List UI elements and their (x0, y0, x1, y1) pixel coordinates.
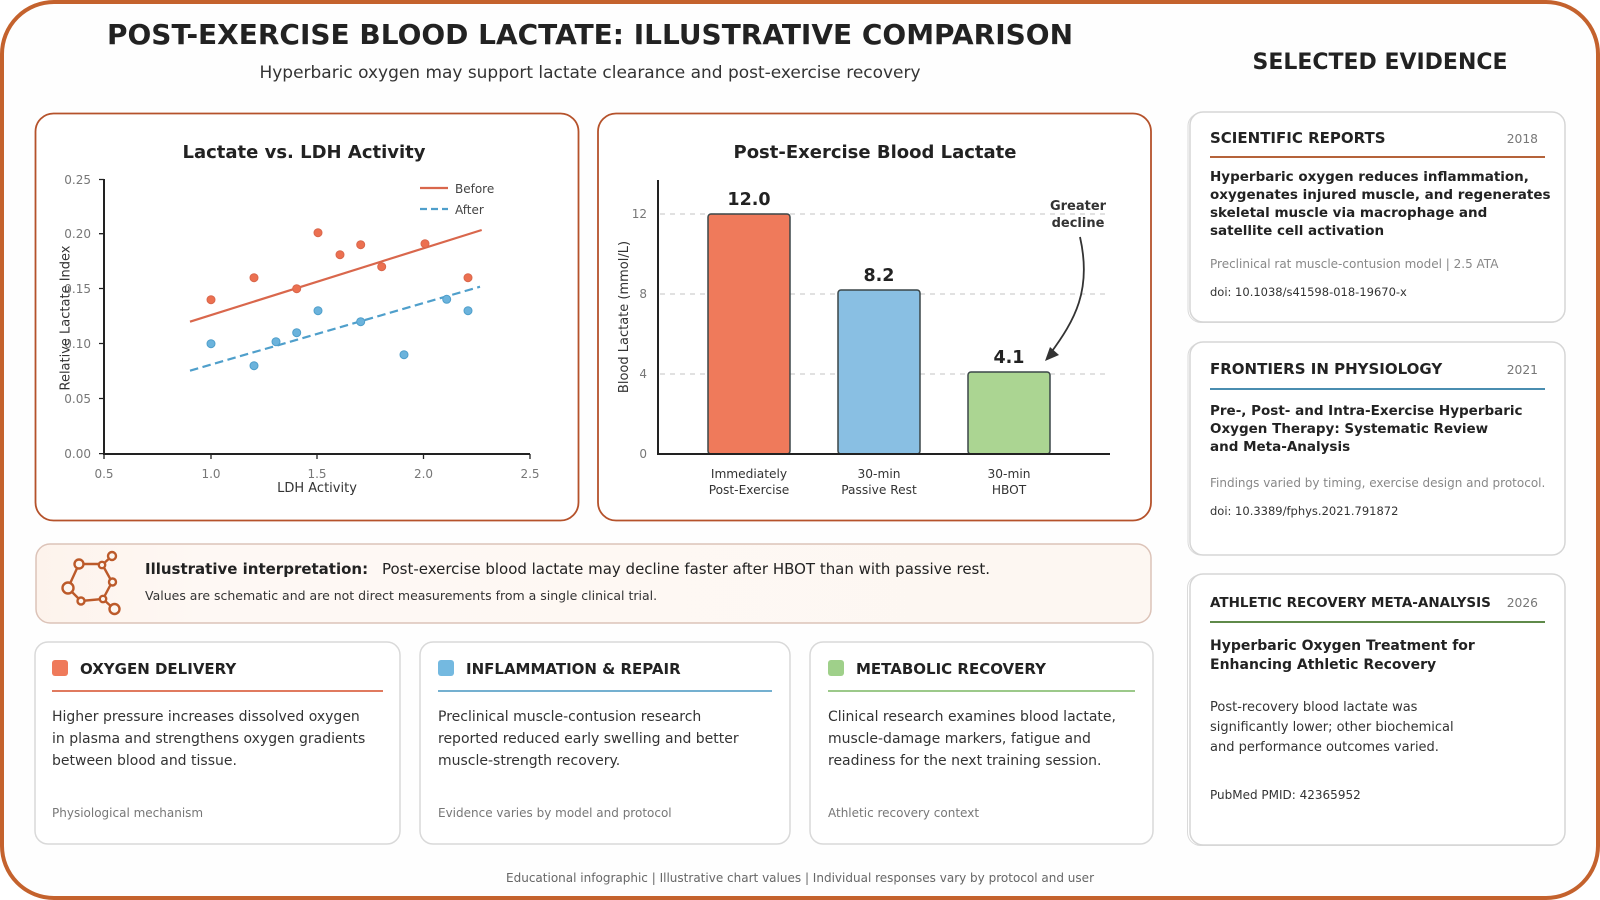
y-axis tick labels: 0.20 (64, 227, 91, 241)
x-axis tick labels: 1.0 (201, 467, 221, 481)
callout heading: Illustrative interpretation: (145, 560, 368, 578)
panel: evidence athletic recovery (1188, 574, 1565, 846)
card body: between blood and tissue. (52, 753, 237, 769)
icon: coral square (52, 660, 68, 676)
x-axis label: LDH Activity (277, 481, 357, 496)
category labels: HBOT (992, 483, 1027, 497)
category labels: Post-Exercise (709, 483, 789, 497)
panel: evidence frontiers in physiology (1188, 342, 1565, 555)
before trend line (190, 230, 482, 322)
title: POST-EXERCISE BLOOD LACTATE: ILLUSTRATIVE COMPARISON (107, 18, 1073, 51)
annotation: greater decline: decline (1052, 216, 1105, 231)
card body (52, 709, 365, 769)
y-axis tick labels (64, 173, 91, 461)
panel: metabolic recovery (810, 642, 1153, 844)
panel: evidence scientific reports (1188, 112, 1565, 322)
card body (438, 709, 739, 769)
journal name: FRONTIERS IN PHYSIOLOGY (1210, 360, 1443, 378)
card body: reported reduced early swelling and better (438, 731, 739, 747)
study summary: Post-recovery blood lactate was (1210, 700, 1418, 715)
year: 2018 (1507, 132, 1538, 146)
x-axis tick labels: 2.5 (520, 467, 540, 481)
year: 2026 (1507, 596, 1538, 610)
x-axis tick labels: 2.0 (414, 467, 433, 481)
gridlines (660, 214, 1110, 374)
bar: immediately post-exercise (708, 214, 790, 454)
y-axis tick labels: 12 (632, 207, 647, 221)
y-axis tick labels: 8 (639, 287, 647, 301)
panel: oxygen delivery (35, 642, 400, 844)
y-axis tick labels: 0.25 (64, 173, 91, 187)
arrow: greater decline (1045, 237, 1084, 361)
y-axis tick labels: 0 (639, 447, 647, 461)
article title: Hyperbaric oxygen reduces inflammation, (1210, 169, 1529, 185)
legend: After (455, 203, 484, 217)
card body: in plasma and strengthens oxygen gradients (52, 731, 365, 747)
value labels: 8.2 (863, 266, 895, 286)
card heading: OXYGEN DELIVERY (80, 660, 237, 678)
card heading: METABOLIC RECOVERY (856, 660, 1047, 678)
article title: and Meta-Analysis (1210, 439, 1350, 455)
icon: green square (828, 660, 844, 676)
article title (1210, 403, 1523, 455)
bar: 30-min HBOT (968, 372, 1050, 454)
doi: doi: 10.3389/fphys.2021.791872 (1210, 504, 1398, 518)
y-axis tick labels: 0.05 (64, 392, 91, 406)
y-axis tick labels: 4 (639, 367, 647, 381)
panel: post-exercise blood lactate bar chart (598, 114, 1151, 520)
value labels: 4.1 (993, 348, 1025, 368)
x-axis tick labels: 0.5 (94, 467, 114, 481)
journal name: ATHLETIC RECOVERY META-ANALYSIS (1210, 595, 1491, 611)
card body (828, 709, 1116, 769)
panel: inflammation and repair (420, 642, 790, 844)
card footer: Physiological mechanism (52, 806, 203, 820)
category labels: Passive Rest (841, 483, 917, 497)
card body: readiness for the next training session. (828, 753, 1102, 769)
x-axis tick labels (94, 467, 540, 481)
article title: skeletal muscle via macrophage and (1210, 205, 1487, 221)
callout statement: Post-exercise blood lactate may decline faster after HBOT than with passive rest. (382, 560, 990, 578)
axes and ticks (99, 179, 530, 459)
chart title: Lactate vs. LDH Activity (182, 142, 426, 163)
category labels: Immediately (711, 467, 787, 481)
study summary (1210, 700, 1454, 755)
y-axis tick labels: 0.00 (64, 447, 91, 461)
x-axis tick labels: 1.5 (307, 467, 327, 481)
value labels: 12.0 (727, 190, 771, 210)
study note: Preclinical rat muscle-contusion model | 2.5 ATA (1210, 257, 1499, 271)
y-axis tick labels (632, 207, 647, 461)
doi: doi: 10.1038/s41598-018-19670-x (1210, 285, 1407, 299)
icon: molecule (62, 552, 120, 614)
annotation: greater decline: Greater (1050, 199, 1107, 214)
card body: Clinical research examines blood lactate, (828, 709, 1116, 725)
article title (1210, 169, 1551, 239)
article title: Enhancing Athletic Recovery (1210, 657, 1436, 673)
card heading: INFLAMMATION & REPAIR (466, 660, 681, 678)
y-axis tick labels: 0.15 (64, 282, 91, 296)
panel: lactate vs LDH scatter chart (36, 114, 578, 520)
y-axis tick labels: 0.10 (64, 337, 91, 351)
category labels: 30-min (858, 467, 900, 481)
callout: illustrative interpretation (36, 544, 1151, 623)
legend (420, 182, 494, 217)
callout note: Values are schematic and are not direct measurements from a single clinical trial. (145, 588, 657, 603)
y-axis label: Blood Lactate (mmol/L) (617, 241, 632, 393)
legend: Before (455, 182, 494, 196)
y-axis label: Relative Lactate Index (58, 245, 74, 390)
card footer: Athletic recovery context (828, 806, 979, 820)
article title: satellite cell activation (1210, 223, 1384, 239)
article title: Oxygen Therapy: Systematic Review (1210, 421, 1488, 437)
study note: Findings varied by timing, exercise design and protocol. (1210, 476, 1545, 490)
journal name: SCIENTIFIC REPORTS (1210, 129, 1386, 147)
article title: Pre-, Post- and Intra-Exercise Hyperbaric (1210, 403, 1523, 419)
after data points (207, 295, 472, 370)
subtitle: Hyperbaric oxygen may support lactate clearance and post-exercise recovery (260, 63, 920, 83)
study summary: significantly lower; other biochemical (1210, 720, 1454, 735)
study summary: and performance outcomes varied. (1210, 740, 1439, 755)
icon: blue square (438, 660, 454, 676)
article title (1210, 638, 1475, 673)
article title: oxygenates injured muscle, and regenerates (1210, 187, 1551, 203)
card body: Preclinical muscle-contusion research (438, 709, 701, 725)
year: 2021 (1507, 363, 1538, 377)
bar: 30-min passive rest (838, 290, 920, 454)
card body: muscle-damage markers, fatigue and (828, 731, 1091, 747)
chart title: Post-Exercise Blood Lactate (734, 142, 1016, 163)
evidence heading: SELECTED EVIDENCE (1252, 50, 1508, 75)
category labels: 30-min (988, 467, 1030, 481)
annotation: greater decline (1050, 199, 1107, 231)
article title: Hyperbaric Oxygen Treatment for (1210, 638, 1475, 654)
before data points (207, 229, 472, 304)
pubmed id: PubMed PMID: 42365952 (1210, 788, 1361, 802)
value labels (727, 190, 1025, 368)
axes (658, 180, 1110, 454)
card body: Higher pressure increases dissolved oxygen (52, 709, 360, 725)
card footer: Evidence varies by model and protocol (438, 806, 672, 820)
footer note: Educational infographic | Illustrative chart values | Individual responses vary by protocol and user (506, 871, 1094, 885)
card body: muscle-strength recovery. (438, 753, 620, 769)
after trend line (190, 287, 480, 371)
category labels (709, 467, 1030, 497)
